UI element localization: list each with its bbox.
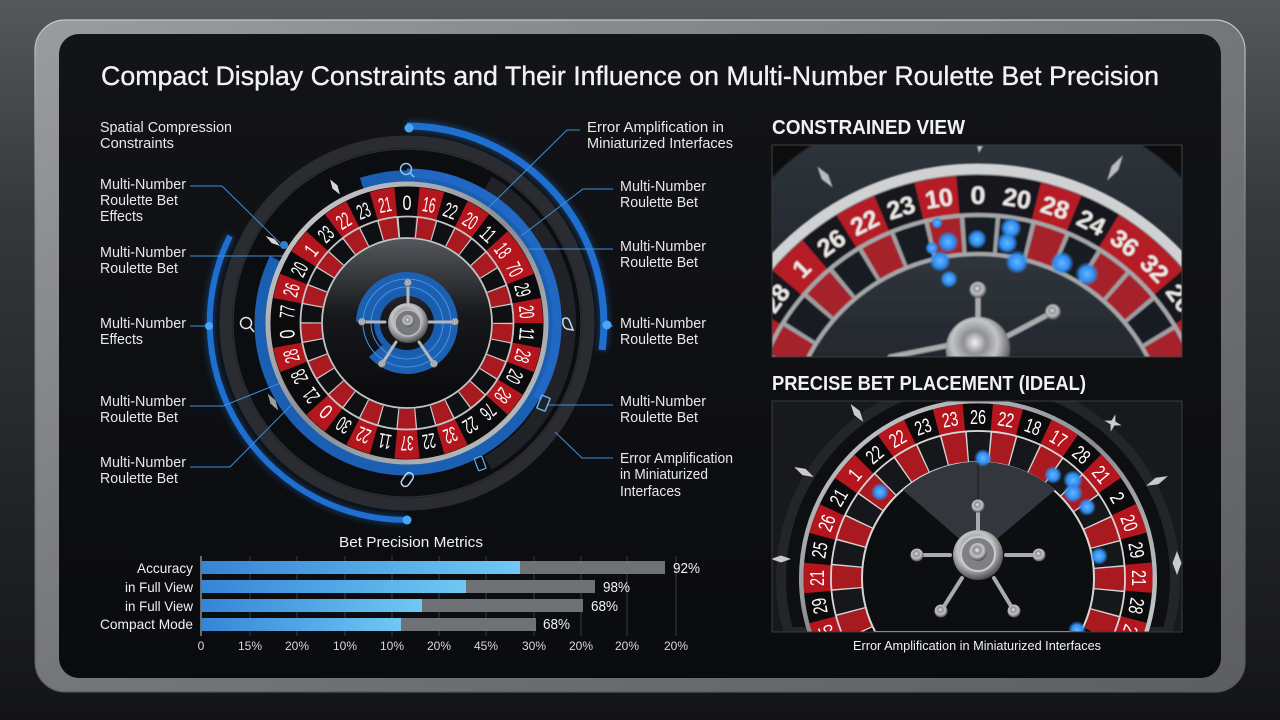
axis labels: 20%	[285, 639, 309, 653]
chrome hub with spokes	[358, 279, 459, 368]
wheel numbers: 22	[354, 421, 374, 447]
label: roulette bet 1: Roulette Bet	[100, 261, 178, 277]
close-up numbers: 24	[1072, 204, 1110, 242]
label: error amplification bottom: Interfaces	[620, 484, 681, 500]
panel border	[772, 401, 1182, 632]
label: number effects: Effects	[100, 332, 143, 348]
label: roulette bet 4: Roulette Bet	[620, 195, 698, 211]
label: roulette bet 1: Multi-Number	[100, 245, 186, 261]
wheel numbers: 11	[475, 222, 500, 248]
blue hub rings	[363, 279, 451, 367]
numbers: 20	[1115, 621, 1141, 644]
numbers: 22	[862, 442, 888, 469]
bar: compact mode: 68%	[543, 617, 570, 633]
bar: accuracy	[137, 560, 700, 577]
heading: constrained view: CONSTRAINED VIEW	[772, 117, 965, 139]
close-up numbers: 0	[970, 182, 986, 210]
numbers: 25	[815, 621, 841, 644]
wheel numbers: 23	[354, 199, 374, 225]
studs	[814, 146, 1126, 190]
caption: Error Amplification in Miniaturized Interfaces	[853, 638, 1101, 653]
close-up numbers: 26	[812, 224, 851, 263]
bar: accuracy: 92%	[673, 561, 700, 577]
silver outer rim	[268, 184, 546, 462]
wheel numbers: 76	[475, 398, 500, 424]
wheel numbers: 22	[440, 199, 460, 225]
numbers: 21	[1087, 462, 1114, 488]
label: roulette bet 5: Roulette Bet	[620, 255, 698, 271]
label: roulette bet 3: Multi-Number	[100, 455, 186, 471]
icon: link bottom	[400, 471, 415, 488]
pocket ring	[846, 446, 1110, 634]
label: spatial compression: Constraints	[100, 136, 174, 152]
wheel numbers: 20	[458, 208, 482, 235]
wheel numbers: 22	[332, 208, 356, 235]
numbers: 18	[1021, 415, 1044, 441]
axis labels: 10%	[380, 639, 404, 653]
misplaced bet markers	[925, 217, 1099, 288]
numbers: 2	[1105, 489, 1128, 507]
label: roulette bet 5	[620, 239, 706, 271]
label: roulette bet 7	[620, 394, 706, 426]
label: roulette bet 1	[100, 245, 186, 277]
number ring red cells	[286, 202, 528, 444]
close-up numbers: 1	[787, 254, 817, 284]
label: roulette bet 3: Roulette Bet	[100, 471, 178, 487]
wheel numbers: 22	[458, 411, 482, 438]
label: roulette bet 2: Multi-Number	[100, 394, 186, 410]
glowing endpoint dots	[205, 124, 612, 524]
label: roulette bet 6	[620, 316, 706, 348]
label: roulette bet 7: Roulette Bet	[620, 410, 698, 426]
numbers: 29	[1123, 540, 1148, 560]
ring lines	[831, 431, 1125, 632]
bar: in full view 2: 68%	[591, 599, 618, 615]
axis labels: 0	[198, 639, 205, 653]
axis labels: 20%	[664, 639, 688, 653]
close-up numbers: 10	[923, 183, 955, 215]
axis labels: 10%	[333, 639, 357, 653]
bar: accuracy: Accuracy	[137, 560, 193, 576]
title: Compact Display Constraints and Their Influence on Multi-Number Roulette Bet Precision	[101, 61, 1159, 91]
left labels	[100, 120, 232, 487]
silver rim close-up	[772, 162, 1182, 272]
label: roulette bet 4: Multi-Number	[620, 179, 706, 195]
numbers: 22	[886, 426, 910, 453]
label: spatial compression: Spatial Compression	[100, 120, 232, 136]
wheel numbers: 20	[501, 365, 527, 387]
precise bet markers	[871, 449, 1108, 639]
label: effects: Roulette Bet	[100, 193, 178, 209]
wheel numbers: 20	[514, 304, 538, 319]
icon: card bottom	[474, 456, 486, 471]
hub with spokes	[910, 500, 1046, 618]
label: roulette bet 2: Roulette Bet	[100, 410, 178, 426]
close-up wheel face	[805, 250, 1151, 356]
icon: magnifier left	[240, 318, 254, 332]
close-up number ring	[772, 174, 1182, 324]
wheel face	[862, 462, 1094, 632]
wheel numbers: 28	[287, 365, 313, 387]
numbers: 23	[912, 415, 935, 441]
bar: in full view 2	[125, 598, 618, 615]
icon: card lower right	[537, 395, 550, 411]
metal studs	[264, 178, 342, 412]
wheel numbers: 0	[402, 192, 412, 215]
axis labels: 20%	[427, 639, 451, 653]
bar: in full view 1: 98%	[603, 580, 630, 596]
label: roulette bet 5: Multi-Number	[620, 239, 706, 255]
glowing outer blue arcs	[210, 126, 604, 520]
numbers: 22	[996, 408, 1016, 433]
wheel numbers: 28	[509, 346, 535, 365]
close-up numbers: 36	[1105, 224, 1144, 263]
label: roulette bet 6: Multi-Number	[620, 316, 706, 332]
close-up numbers: 23	[883, 191, 919, 226]
numbers	[807, 407, 1149, 644]
wheel numbers: 1	[300, 241, 323, 261]
label: error amplification bottom: Error Amplification	[620, 451, 733, 467]
label: effects	[100, 177, 186, 225]
wheel numbers	[276, 192, 538, 454]
close-up hub	[886, 280, 1062, 356]
wheel numbers: 22	[420, 428, 437, 453]
lit wedge	[903, 462, 1055, 539]
close-up pocket ring	[786, 216, 1172, 344]
panel border	[772, 145, 1182, 357]
label: roulette bet 7: Multi-Number	[620, 394, 706, 410]
numbers: 25	[808, 540, 833, 560]
housing ring	[781, 381, 1175, 632]
axis labels: 20%	[569, 639, 593, 653]
inner pocket ring	[311, 227, 503, 419]
label: roulette bet 4	[620, 179, 706, 211]
wheel numbers: 20	[287, 259, 313, 281]
pocket dividers	[303, 219, 511, 427]
label: error amplification top	[587, 120, 733, 152]
close-up numbers: 32	[1134, 249, 1174, 289]
numbers: 17	[1046, 426, 1070, 453]
bar: in full view 2: in Full View	[125, 598, 194, 614]
numbers: 21	[1127, 570, 1149, 586]
number ring	[817, 417, 1139, 646]
axis labels: 30%	[522, 639, 546, 653]
panel: precise placement close-up	[772, 402, 1182, 632]
wheel numbers: 11	[514, 327, 538, 342]
axis labels: 20%	[615, 639, 639, 653]
wheel numbers: 21	[377, 193, 394, 218]
roulette wheel diagram	[190, 124, 613, 524]
studs	[771, 402, 1182, 575]
pocket ring outer line	[300, 216, 514, 430]
wheel numbers: 30	[332, 411, 356, 438]
label: error amplification bottom	[620, 451, 733, 500]
leader lines	[190, 130, 613, 467]
wheel numbers: 26	[279, 281, 305, 300]
numbers: 28	[1068, 442, 1094, 469]
axis labels	[198, 639, 688, 653]
icon: magnifier top	[400, 164, 414, 177]
label: spatial compression	[100, 120, 232, 152]
numbers: 26	[970, 407, 986, 429]
label: error amplification top: Error Amplification in	[587, 120, 724, 136]
wheel numbers: 0	[315, 400, 337, 423]
outer housing rings	[226, 142, 588, 504]
bar: in full view 1	[125, 579, 630, 596]
label: number effects: Multi-Number	[100, 316, 186, 332]
numbers: 20	[1115, 512, 1141, 535]
silver rim	[802, 402, 1154, 632]
close-up numbers: 22	[846, 204, 884, 242]
close-up numbers: 28	[757, 279, 796, 318]
wheel numbers: 23	[314, 222, 339, 248]
numbers: 1	[844, 465, 867, 486]
label: error amplification bottom: in Miniaturized	[620, 467, 708, 483]
icon: tag right	[563, 318, 573, 330]
numbers: 28	[1123, 596, 1148, 616]
bar chart: bet precision metrics	[100, 535, 700, 653]
blue band around the wheel	[261, 173, 557, 469]
axis labels: 45%	[474, 639, 498, 653]
wheel numbers: 37	[400, 431, 414, 454]
wheel face disk	[322, 238, 492, 408]
axis labels: 15%	[238, 639, 262, 653]
label: number effects	[100, 316, 186, 348]
numbers: 26	[815, 512, 841, 535]
wheel numbers: 16	[420, 193, 437, 218]
numbers: 29	[808, 596, 833, 616]
panel: constrained view close-up	[772, 146, 1182, 356]
bar: in full view 1: in Full View	[125, 579, 194, 595]
right labels	[587, 120, 733, 500]
label: roulette bet 2	[100, 394, 186, 426]
close-up numbers: 20	[1001, 183, 1033, 215]
label: roulette bet 6: Roulette Bet	[620, 332, 698, 348]
wheel numbers: 0	[276, 328, 300, 340]
wheel numbers: 28	[489, 383, 515, 407]
bar: compact mode: Compact Mode	[100, 616, 193, 632]
close-up numbers	[772, 184, 1182, 315]
wheel numbers: 32	[440, 421, 460, 447]
wheel numbers: 77	[276, 304, 300, 319]
wheel numbers: 21	[299, 383, 325, 407]
wheel numbers: 18	[489, 239, 515, 263]
numbers: 23	[940, 408, 960, 433]
label: error amplification top: Miniaturized Interfaces	[587, 136, 733, 152]
close-up numbers: 28	[1037, 191, 1073, 226]
close-up numbers: 20	[1160, 279, 1199, 318]
label: roulette bet 3	[100, 455, 186, 487]
wheel numbers: 70	[501, 259, 527, 281]
heading: precise bet placement: PRECISE BET PLACEMENT (IDEAL)	[772, 373, 1086, 395]
label: effects: Effects	[100, 209, 143, 225]
wheel numbers: 29	[509, 281, 535, 300]
label: effects: Multi-Number	[100, 177, 186, 193]
bar: compact mode	[100, 616, 570, 633]
wheel numbers: 11	[377, 428, 394, 453]
wheel numbers: 28	[279, 346, 305, 365]
dark corner shading	[772, 145, 1182, 178]
chart heading: Bet Precision Metrics	[339, 535, 483, 551]
numbers: 21	[807, 570, 829, 586]
numbers: 21	[826, 486, 853, 510]
